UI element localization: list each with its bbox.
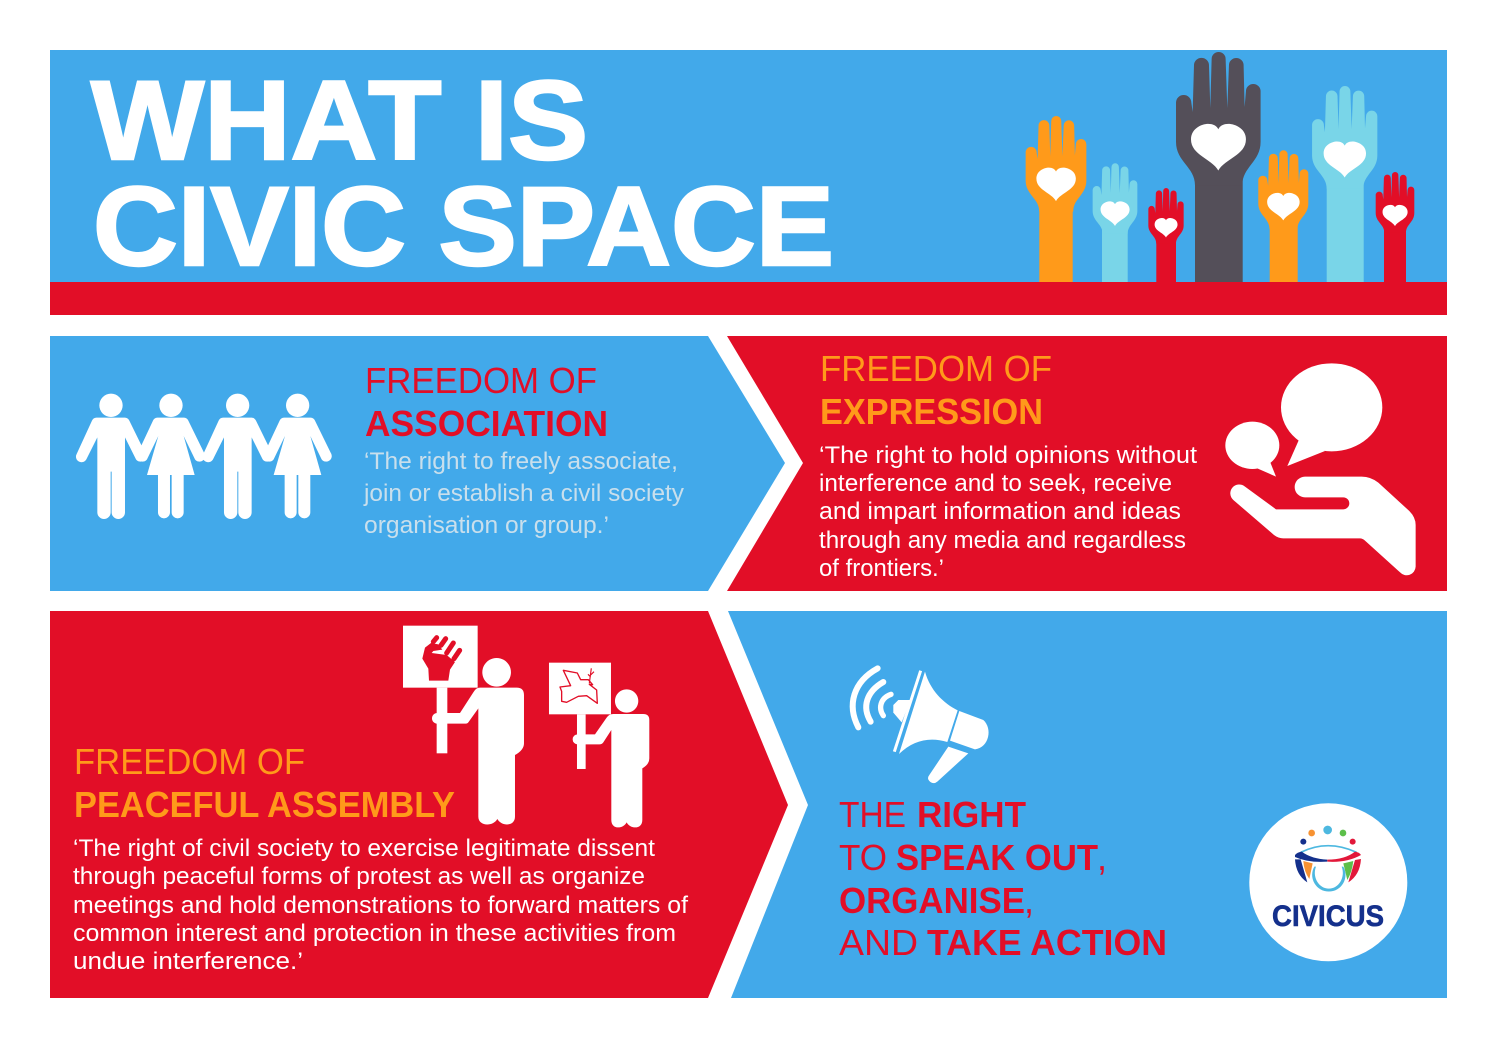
association text [363, 448, 685, 539]
title [91, 58, 834, 289]
assembly text: ‘The right of civil society to exercise legitimate dissent [73, 835, 655, 862]
right to speak out slogan: TAKE ACTION [927, 922, 1167, 963]
right to speak out slogan: ORGANISE [839, 880, 1025, 921]
protester two [573, 689, 649, 827]
title: CIVIC SPACE [93, 164, 834, 289]
assembly text: meetings and hold demonstrations to forward matters of [73, 892, 688, 919]
expression text [819, 442, 1197, 582]
header panel [50, 50, 1447, 315]
right to speak out slogan: AND [839, 922, 918, 963]
expression text: of frontiers.’ [819, 555, 944, 582]
assembly text: common interest and protection in these activities from [73, 920, 676, 947]
assembly heading [74, 741, 455, 825]
right to speak out slogan: , [1024, 880, 1034, 921]
red header band [50, 282, 1447, 315]
association text: ‘The right to freely associate, [364, 448, 678, 475]
icon: people holding hands [76, 394, 332, 519]
expression text: interference and to seek, receive [819, 470, 1172, 497]
placard with dove [549, 663, 611, 769]
icon: megaphone [853, 668, 989, 783]
placard with fist [403, 626, 478, 753]
right to speak out slogan: , [1097, 837, 1107, 878]
expression text: and impart information and ideas [819, 498, 1181, 525]
panel: freedom of peaceful assembly [50, 611, 788, 998]
assembly text [73, 835, 688, 975]
CIVICUS logo: CIVICUS [1272, 900, 1384, 933]
association text: organisation or group.’ [364, 512, 609, 539]
panel: right to speak out [728, 611, 1447, 998]
assembly text: through peaceful forms of protest as well as organize [73, 863, 645, 890]
association heading: ASSOCIATION [365, 403, 608, 444]
expression heading: EXPRESSION [820, 391, 1043, 432]
assembly text: undue interference.’ [73, 948, 303, 975]
right to speak out slogan: TO [839, 837, 887, 878]
expression text: through any media and regardless [819, 527, 1186, 554]
icon: raised hands with hearts [1026, 52, 1414, 282]
right to speak out slogan: THE [839, 794, 906, 835]
right to speak out slogan: SPEAK OUT [896, 837, 1098, 878]
panel: freedom of association [50, 336, 785, 591]
expression text: ‘The right to hold opinions without [819, 442, 1197, 469]
expression heading: FREEDOM OF [820, 348, 1052, 389]
assembly heading: PEACEFUL ASSEMBLY [74, 784, 455, 825]
icon: protesters with placards [403, 626, 649, 827]
panel: freedom of expression [727, 336, 1447, 591]
right to speak out slogan [839, 794, 1167, 963]
protester one [432, 658, 524, 824]
assembly heading: FREEDOM OF [74, 741, 305, 782]
CIVICUS logo [1249, 803, 1407, 961]
right to speak out slogan: RIGHT [917, 794, 1026, 835]
icon: speech bubbles over open hand [1225, 363, 1416, 575]
expression heading [820, 348, 1052, 432]
association heading [365, 360, 608, 444]
association heading: FREEDOM OF [365, 360, 597, 401]
association text: join or establish a civil society [363, 480, 685, 507]
title: WHAT IS [91, 58, 588, 183]
